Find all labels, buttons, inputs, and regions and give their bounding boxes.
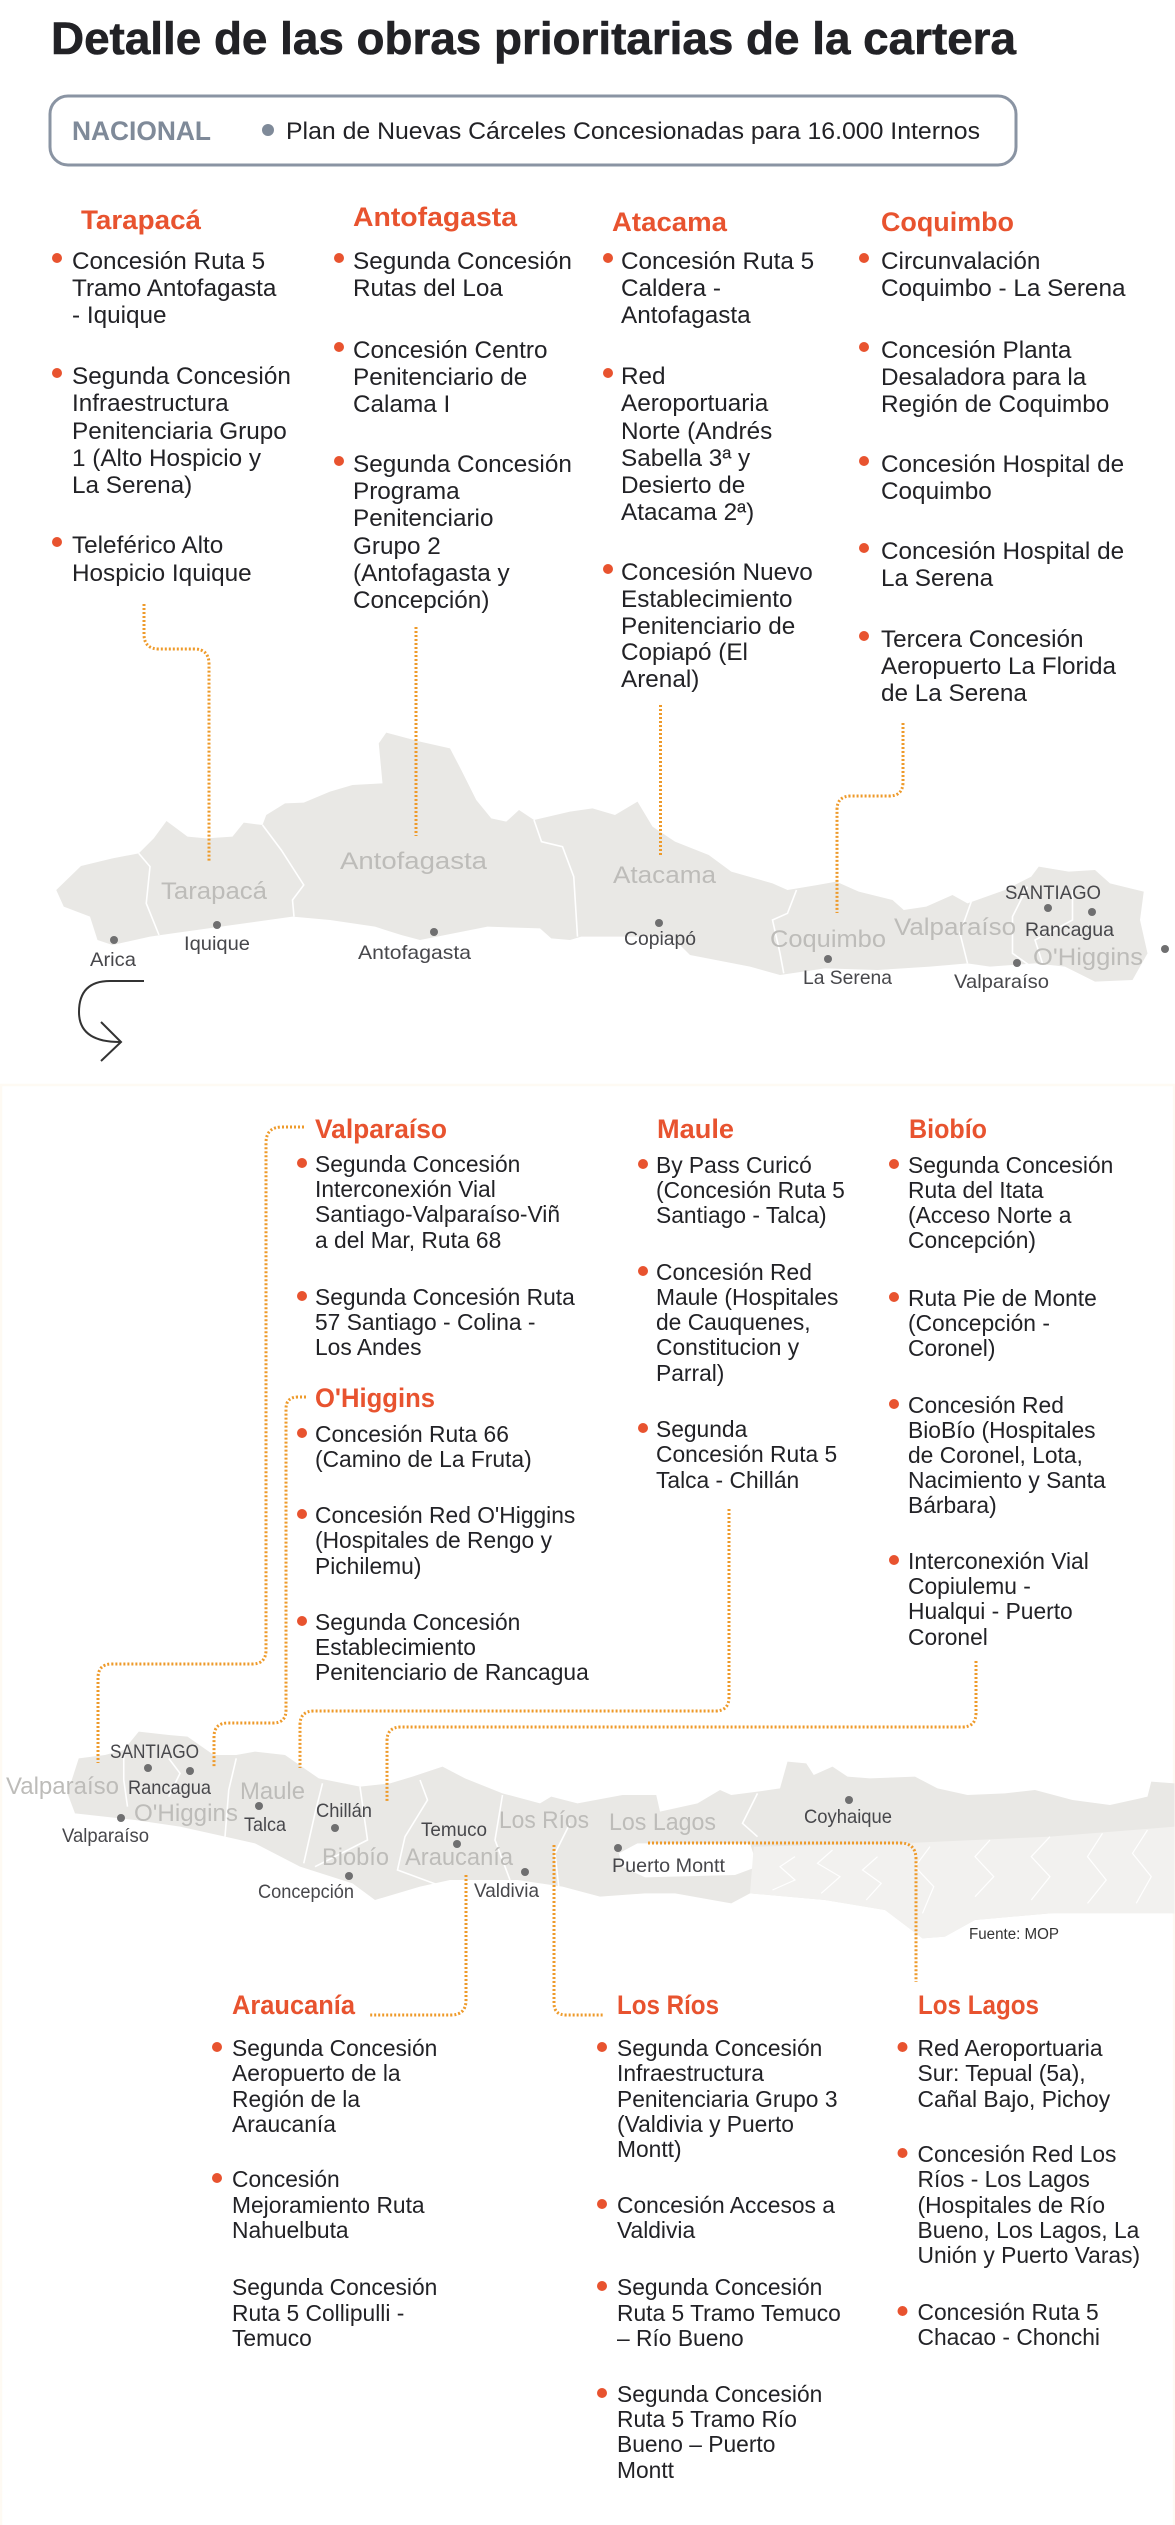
item: Desaladora para la (881, 364, 1087, 391)
region labels: Los Ríos (499, 1807, 589, 1834)
item: Interconexión Vial (908, 1548, 1089, 1574)
item: Segunda (656, 1416, 748, 1442)
item: Concesión Hospital de (881, 451, 1124, 478)
item: a del Mar, Ruta 68 (315, 1227, 501, 1253)
item (859, 626, 1116, 707)
item (898, 2299, 1100, 2350)
item: Infraestructura (72, 390, 229, 417)
city markers (110, 904, 1169, 967)
item: Aeroportuaria (621, 390, 769, 417)
region labels: O'Higgins (134, 1800, 238, 1827)
item (603, 363, 772, 526)
panel: Los Lagos (898, 1990, 1140, 2350)
item: Santiago-Valparaíso-Viñ (315, 1201, 560, 1227)
item (603, 248, 814, 329)
item: Segunda Concesión (232, 2274, 437, 2300)
item: Grupo 2 (353, 533, 441, 560)
map: sur de Chile (6, 1732, 1174, 1938)
region labels: Tarapacá (161, 878, 268, 905)
item (859, 451, 1124, 505)
item: Segunda Concesión (72, 363, 291, 390)
item: Red (621, 363, 666, 390)
item: Ríos - Los Lagos (918, 2166, 1090, 2192)
item: Concesión Red (656, 1259, 812, 1285)
item: Segunda Concesión (353, 451, 572, 478)
item (638, 1259, 838, 1386)
item (52, 363, 291, 499)
item: Araucanía (232, 2111, 336, 2137)
heading: Tarapacá (81, 205, 202, 235)
city labels: Valdivia (474, 1880, 539, 1902)
city labels: SANTIAGO (110, 1741, 199, 1763)
item (297, 1151, 560, 1253)
panel: Valparaíso (297, 1114, 575, 1360)
city labels: Copiapó (624, 928, 696, 950)
item: (Hospitales de Río (918, 2192, 1105, 2218)
item: Sabella 3ª y (621, 445, 751, 472)
item (898, 2035, 1111, 2112)
item: Montt) (617, 2136, 682, 2162)
connector: Biobío (387, 1661, 976, 1802)
item: (Camino de La Fruta) (315, 1446, 532, 1472)
item: Establecimiento (621, 586, 793, 613)
region labels: O'Higgins (1033, 944, 1143, 971)
item: Norte (Andrés (621, 418, 772, 445)
heading: nacional: NACIONAL (72, 116, 211, 146)
item: de La Serena (881, 680, 1027, 707)
item: Bueno, Los Lagos, La (918, 2217, 1140, 2243)
item: Hualqui - Puerto (908, 1598, 1073, 1624)
item (297, 1502, 575, 1579)
item: Penitenciario (353, 505, 493, 532)
item: Santiago - Talca) (656, 1202, 827, 1228)
item: (Hospitales de Rengo y (315, 1527, 553, 1553)
panel: Tarapacá (52, 205, 291, 587)
connector: O'Higgins (214, 1397, 306, 1768)
connector: Coquimbo (837, 723, 903, 913)
item (638, 1416, 837, 1493)
panel: Atacama (603, 207, 814, 693)
city labels: Rancagua (1025, 919, 1114, 941)
item (297, 1284, 575, 1360)
item: Concesión Planta (881, 337, 1072, 364)
item: Copiulemu - (908, 1573, 1031, 1599)
item: Segunda Concesión (353, 248, 572, 275)
item: Atacama 2ª) (621, 499, 754, 526)
connector: Antofagasta (414, 627, 418, 836)
item: – Río Bueno (617, 2325, 744, 2351)
city labels (90, 882, 1114, 993)
item: Concesión Ruta 5 (918, 2299, 1099, 2325)
item: By Pass Curicó (656, 1152, 812, 1178)
item: Temuco (232, 2325, 312, 2351)
item (859, 538, 1124, 592)
region labels: Valparaíso (894, 914, 1016, 941)
item (638, 1152, 845, 1228)
item: Tercera Concesión (881, 626, 1084, 653)
panel: O'Higgins (297, 1383, 589, 1685)
item: - Iquique (72, 302, 167, 329)
city labels: Iquique (184, 933, 250, 955)
item (52, 532, 252, 587)
item (597, 2192, 835, 2243)
region labels (161, 848, 1143, 971)
item: Concesión Red Los (918, 2141, 1116, 2167)
item (297, 1609, 589, 1685)
item: Segunda Concesión (617, 2035, 822, 2061)
panel: Antofagasta (334, 202, 572, 614)
item: Talca - Chillán (656, 1467, 799, 1493)
city labels: Talca (244, 1814, 286, 1836)
city labels: Concepción (258, 1881, 354, 1903)
item: Teleférico Alto (72, 532, 223, 559)
item: Establecimiento (315, 1634, 476, 1660)
item (334, 451, 572, 614)
item: Segunda Concesión (232, 2035, 437, 2061)
panel: nacional (50, 96, 1016, 165)
item: Segunda Concesión (908, 1152, 1113, 1178)
heading: Los Lagos (918, 1990, 1039, 2020)
city labels: Rancagua (128, 1777, 211, 1799)
item: Hospicio Iquique (72, 560, 252, 587)
item: Sur: Tepual (5a), (918, 2060, 1086, 2086)
item: Concesión Ruta 5 (72, 248, 265, 275)
region labels: Maule (240, 1778, 305, 1805)
item: Red Aeroportuaria (918, 2035, 1103, 2061)
panel: Biobío (889, 1114, 1113, 1650)
city labels: Arica (90, 949, 136, 971)
item: Concesión Red (908, 1392, 1064, 1418)
item: Chacao - Chonchi (918, 2324, 1100, 2350)
item: Maule (Hospitales (656, 1284, 838, 1310)
item: Penitenciario de (621, 613, 795, 640)
item: Ruta Pie de Monte (908, 1285, 1097, 1311)
item: La Serena) (72, 472, 192, 499)
item (889, 1285, 1097, 1361)
item (889, 1548, 1089, 1650)
item: Rutas del Loa (353, 275, 503, 302)
heading: Maule (657, 1114, 734, 1144)
item: (Antofagasta y (353, 560, 511, 587)
heading: Araucanía (232, 1990, 356, 2020)
nacional item: Plan de Nuevas Cárceles Concesionadas para 16.000 Internos (286, 118, 980, 145)
region labels: Biobío (322, 1844, 389, 1871)
item: Copiapó (El (621, 639, 748, 666)
item: Concesión Ruta 5 (621, 248, 814, 275)
item (597, 2381, 822, 2483)
city labels: Temuco (421, 1819, 487, 1841)
source: Fuente: MOP (969, 1926, 1059, 1943)
item: Pichilemu) (315, 1553, 421, 1579)
item: Concesión Centro (353, 337, 547, 364)
heading: Los Ríos (617, 1990, 719, 2020)
item (334, 337, 547, 418)
item: Concesión Ruta 5 (656, 1441, 837, 1467)
city labels: La Serena (803, 967, 892, 989)
item: Concesión Hospital de (881, 538, 1124, 565)
item: Coquimbo - La Serena (881, 275, 1126, 302)
item: Ruta del Itata (908, 1177, 1044, 1203)
item: Nacimiento y Santa (908, 1467, 1106, 1493)
connector: Los Ríos (554, 1845, 603, 2015)
item (889, 1392, 1106, 1518)
heading: Atacama (612, 207, 728, 237)
item: Aeropuerto La Florida (881, 653, 1116, 680)
map: norte de Chile (56, 733, 1169, 993)
region labels (6, 1773, 716, 1871)
item: 57 Santiago - Colina - (315, 1309, 536, 1335)
city labels: Valparaíso (954, 971, 1049, 993)
connector: Tarapacá (144, 604, 209, 862)
item: Los Andes (315, 1334, 421, 1360)
city markers (117, 1764, 853, 1880)
city labels: Antofagasta (358, 942, 471, 964)
panel: Los Ríos (597, 1990, 841, 2483)
item: Coronel (908, 1624, 988, 1650)
panel: Maule (638, 1114, 845, 1493)
item: Región de la (232, 2086, 360, 2112)
item: (Valdivia y Puerto (617, 2111, 794, 2137)
item: Valdivia (617, 2217, 695, 2243)
item: Arenal) (621, 666, 699, 693)
item (334, 248, 572, 302)
item: Bárbara) (908, 1492, 997, 1518)
item: Aeropuerto de la (232, 2060, 401, 2086)
item: Coronel) (908, 1335, 995, 1361)
heading: Valparaíso (315, 1114, 447, 1144)
connector: Los Lagos (648, 1843, 916, 1982)
item: Segunda Concesión (617, 2274, 822, 2300)
item: (Acceso Norte a (908, 1202, 1072, 1228)
item: Concesión Ruta 66 (315, 1421, 509, 1447)
item: Programa (353, 478, 460, 505)
item: Ruta 5 Tramo Río (617, 2406, 797, 2432)
item: Nahuelbuta (232, 2217, 349, 2243)
item: Bueno – Puerto (617, 2431, 775, 2457)
item: BioBío (Hospitales (908, 1417, 1096, 1443)
item: Constitucion y (656, 1334, 800, 1360)
heading: Antofagasta (353, 202, 518, 232)
city labels: Valparaíso (62, 1825, 149, 1847)
connector: Maule (300, 1509, 729, 1768)
item: Parral) (656, 1360, 724, 1386)
item: (Concesión Ruta 5 (656, 1177, 845, 1203)
item: Concesión (232, 2166, 340, 2192)
item: Mejoramiento Ruta (232, 2192, 425, 2218)
item: Circunvalación (881, 248, 1040, 275)
item: Segunda Concesión (315, 1609, 520, 1635)
city labels (62, 1741, 892, 1903)
heading: O'Higgins (315, 1383, 435, 1413)
panel: Araucanía (212, 1990, 437, 2351)
item (859, 248, 1126, 302)
item: Tramo Antofagasta (72, 275, 277, 302)
item: Infraestructura (617, 2060, 764, 2086)
item: Penitenciaria Grupo (72, 418, 287, 445)
item: Caldera - (621, 275, 721, 302)
item (212, 2035, 437, 2137)
title: Detalle de las obras prioritarias de la cartera (51, 13, 1017, 64)
item: Unión y Puerto Varas) (918, 2242, 1140, 2268)
item: Desierto de (621, 472, 745, 499)
item: 1 (Alto Hospicio y (72, 445, 262, 472)
item: La Serena (881, 565, 994, 592)
item: Penitenciario de Rancagua (315, 1659, 589, 1685)
city labels: Coyhaique (804, 1806, 892, 1828)
item (597, 2035, 838, 2162)
region labels: Coquimbo (770, 926, 886, 953)
connector: Atacama (659, 705, 662, 857)
item: Penitenciario de (353, 364, 527, 391)
region labels: Atacama (613, 862, 717, 889)
city labels: SANTIAGO (1005, 882, 1101, 904)
item: (Concepción - (908, 1310, 1050, 1336)
item: Segunda Concesión (315, 1151, 520, 1177)
item: Región de Coquimbo (881, 391, 1109, 418)
item (52, 248, 277, 329)
item: Cañal Bajo, Pichoy (918, 2086, 1111, 2112)
item: Ruta 5 Tramo Temuco (617, 2300, 841, 2326)
connector: Araucanía (369, 1875, 466, 2015)
item: de Coronel, Lota, (908, 1442, 1083, 1468)
heading: Coquimbo (881, 207, 1014, 237)
item: Antofagasta (621, 302, 751, 329)
region labels: Valparaíso (6, 1773, 119, 1800)
item: Concepción) (908, 1227, 1036, 1253)
item (603, 559, 813, 693)
heading: Biobío (909, 1114, 987, 1144)
arrow: continúa (79, 981, 144, 1061)
city labels: Puerto Montt (612, 1855, 726, 1877)
item: Coquimbo (881, 478, 992, 505)
item: Concesión Accesos a (617, 2192, 835, 2218)
region labels: Antofagasta (340, 848, 488, 875)
item: Ruta 5 Collipulli - (232, 2300, 404, 2326)
item: Segunda Concesión (617, 2381, 822, 2407)
item: de Cauquenes, (656, 1309, 811, 1335)
item (212, 2166, 425, 2243)
region labels: Araucanía (405, 1844, 514, 1871)
item: Penitenciaria Grupo 3 (617, 2086, 838, 2112)
item (597, 2274, 841, 2351)
item: Interconexión Vial (315, 1176, 496, 1202)
item: Concepción) (353, 587, 489, 614)
item: Concesión Nuevo (621, 559, 813, 586)
panel: Coquimbo (859, 207, 1126, 707)
city labels: Chillán (316, 1800, 372, 1822)
item (297, 1421, 532, 1472)
item: Concesión Red O'Higgins (315, 1502, 575, 1528)
item: Montt (617, 2457, 675, 2483)
item (859, 337, 1109, 418)
item: Calama I (353, 391, 450, 418)
region labels: Los Lagos (609, 1809, 716, 1836)
item: Segunda Concesión Ruta (315, 1284, 575, 1310)
item (898, 2141, 1140, 2268)
connector: Valparaíso (98, 1127, 304, 1763)
item (889, 1152, 1113, 1253)
